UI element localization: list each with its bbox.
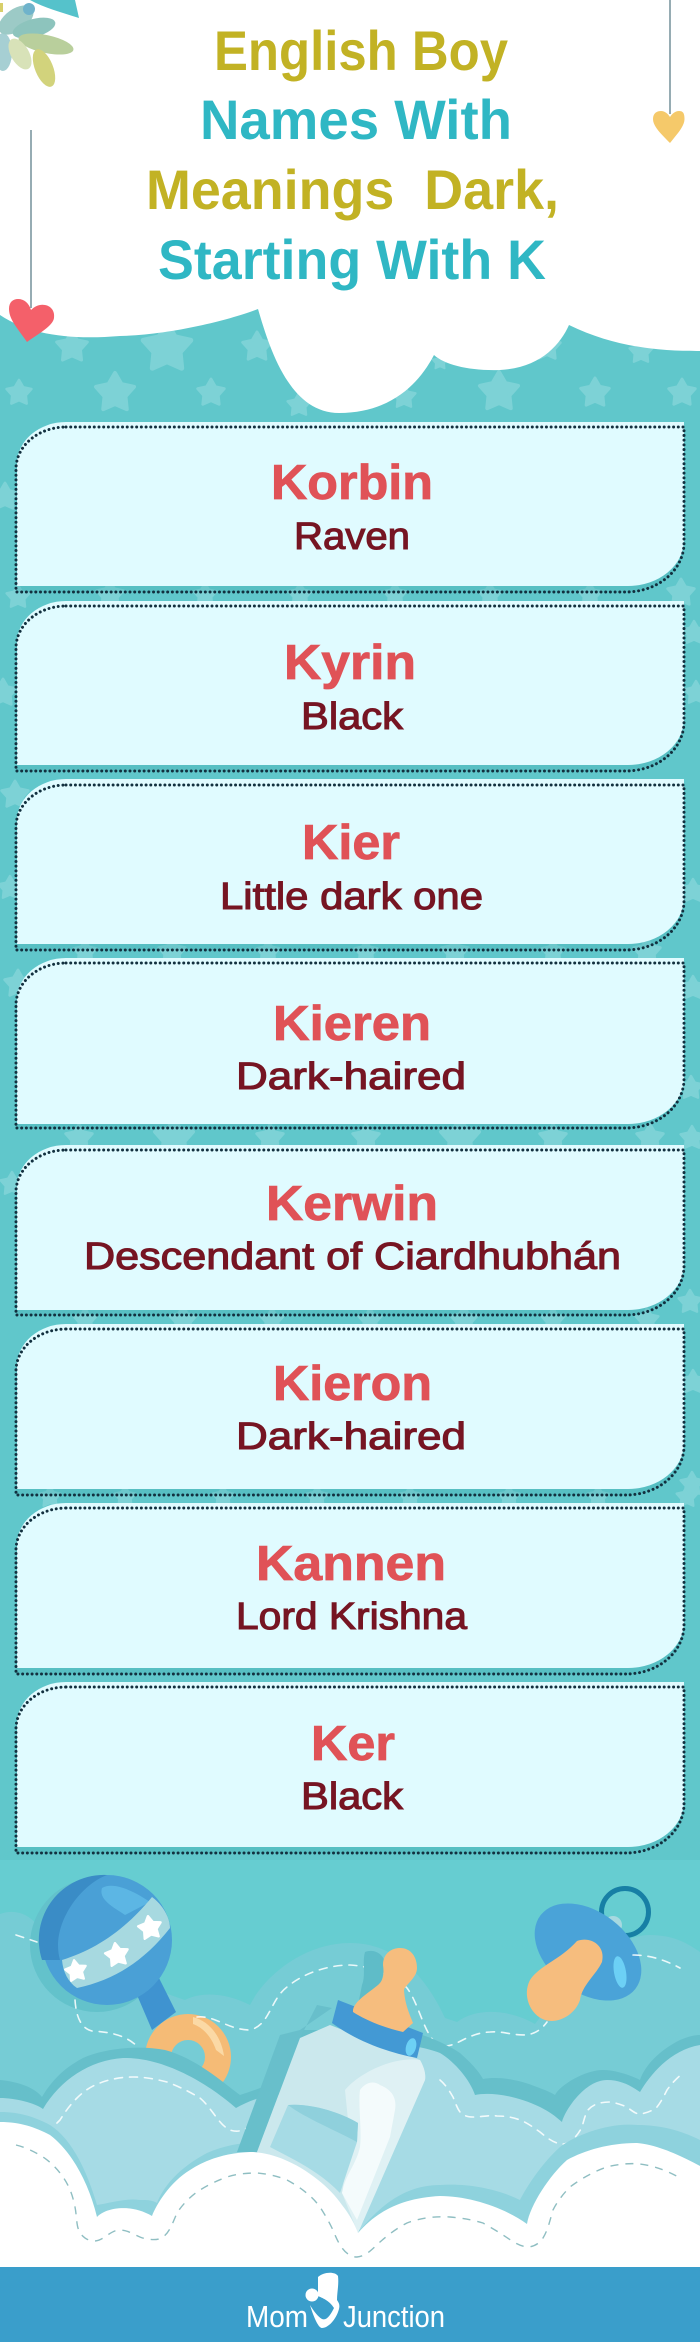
panel: Kerwin: Kerwin [266, 1177, 438, 1231]
icon: pacifier [516, 1884, 660, 2021]
header white cloud [0, 0, 700, 413]
panel: Korbin: Korbin [271, 456, 433, 510]
lower background [0, 1860, 700, 2342]
panel: Kier: Little dark one [220, 876, 483, 918]
panel: Kier [16, 779, 684, 950]
logo: MomJunction: Junction [343, 2299, 445, 2334]
icon: rattle [30, 1875, 224, 2087]
icon: teal pennant [30, 0, 79, 18]
footer bar [0, 2267, 700, 2342]
title [146, 19, 559, 291]
logo: MomJunction: Mom [246, 2299, 308, 2334]
star pattern [0, 323, 700, 1506]
bottom illustration [0, 1875, 700, 2270]
icon: hanging red heart [9, 130, 54, 342]
title: Meanings Dark, [146, 158, 559, 221]
mid cloud layer [0, 2043, 700, 2270]
panel: Ker [16, 1682, 684, 1853]
panel: Kier: Kier [302, 816, 400, 870]
panel: Kannen: Kannen [256, 1537, 446, 1591]
panel: Kyrin [16, 601, 684, 771]
icon: hanging yellow heart [653, 0, 684, 143]
back cloud layer [0, 1912, 700, 2270]
panel: Kerwin: Descendant of Ciardhubhán [84, 1236, 621, 1278]
title: Names With [200, 88, 512, 151]
icon: baby bottle [237, 1948, 425, 2233]
panel: Kieron [16, 1324, 684, 1495]
panel: Ker: Black [301, 1776, 404, 1818]
panel: Ker: Ker [311, 1717, 395, 1771]
panel: Kieren: Dark-haired [236, 1056, 466, 1098]
icon: watercolor leaves [0, 0, 75, 90]
panel: Korbin [16, 422, 684, 592]
logo: MomJunction [246, 2273, 445, 2334]
mid cloud rim [0, 2030, 700, 2270]
front white cloud [0, 2122, 700, 2270]
panel: Kieren: Kieren [273, 997, 431, 1051]
panel: Kyrin: Kyrin [284, 636, 416, 690]
panel: Kannen [16, 1503, 684, 1674]
panel: Kieron: Dark-haired [236, 1416, 466, 1458]
title: English Boy [214, 19, 508, 82]
panel: Kerwin [16, 1145, 684, 1315]
title: Starting With K [158, 228, 546, 291]
icon: mother and baby silhouette [306, 2273, 339, 2328]
panel: Kyrin: Black [301, 696, 404, 738]
panel: Kannen: Lord Krishna [236, 1596, 468, 1638]
panel: Korbin: Raven [294, 516, 410, 558]
dashed stitch lines middle [45, 2073, 683, 2144]
front cloud rim [0, 2112, 700, 2270]
dashed stitch line on white cloud [16, 2145, 680, 2257]
panel: Kieron: Kieron [273, 1357, 432, 1411]
dashed stitch lines upper [16, 1935, 680, 2046]
panel: Kieren [16, 958, 684, 1128]
